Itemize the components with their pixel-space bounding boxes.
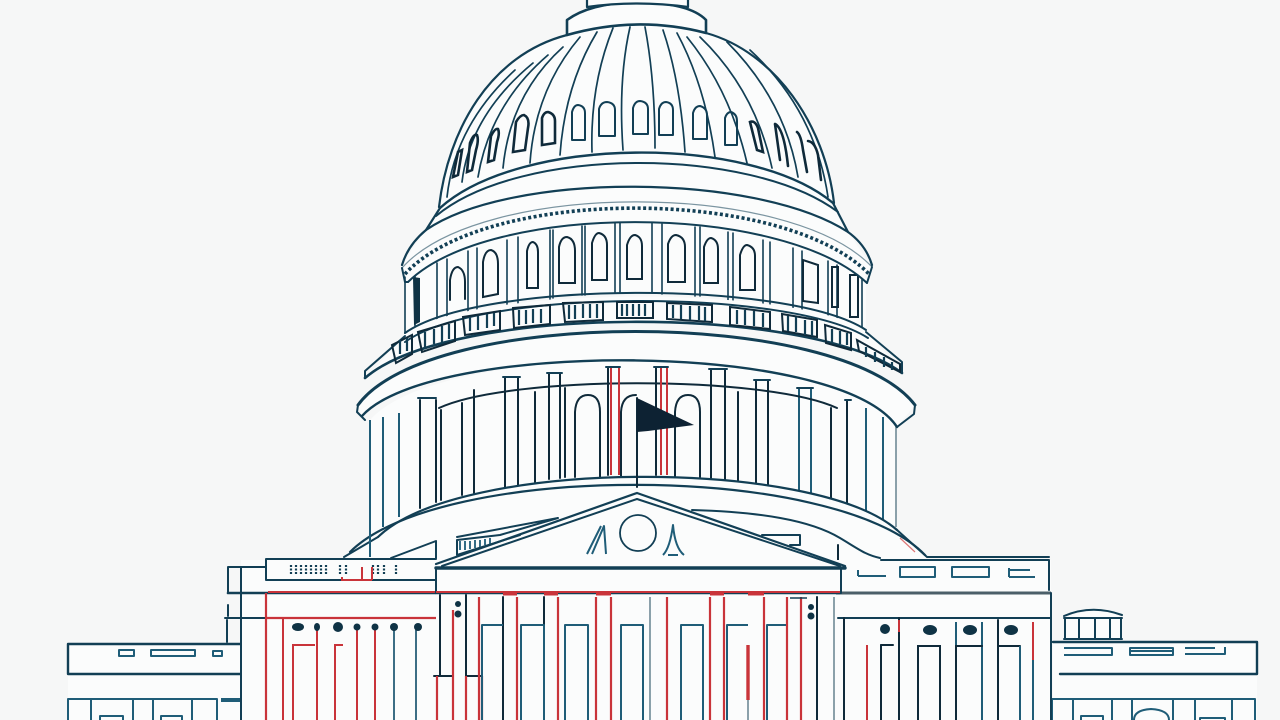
balcony ring xyxy=(357,332,915,427)
right annex with cupola xyxy=(1052,610,1257,720)
balustrade xyxy=(365,293,902,380)
portico columns xyxy=(434,594,834,720)
dome band xyxy=(426,153,848,232)
dome ribs xyxy=(447,27,828,197)
colonnade xyxy=(370,360,897,557)
drum xyxy=(405,220,866,335)
pediment xyxy=(436,493,845,568)
wing columns and medallions xyxy=(283,619,422,720)
right wing xyxy=(836,560,1051,720)
arches xyxy=(575,395,700,477)
drum pilasters xyxy=(405,223,862,335)
central portico xyxy=(434,568,841,720)
lantern collar xyxy=(567,0,706,35)
left wing xyxy=(225,559,441,720)
dome windows xyxy=(453,101,821,180)
wing windows xyxy=(858,567,1035,577)
left annex xyxy=(68,644,266,720)
column shafts xyxy=(383,367,896,527)
rotunda base and side roofs xyxy=(344,420,1049,570)
pediment ornament xyxy=(587,515,684,555)
wing parapet xyxy=(228,559,436,593)
portico windows xyxy=(482,625,786,720)
flag xyxy=(637,398,694,487)
frieze and cornice xyxy=(402,187,872,283)
wing columns and medallions xyxy=(844,618,1033,720)
drum windows xyxy=(450,233,858,317)
cupola xyxy=(1064,610,1122,639)
dome xyxy=(426,24,848,232)
